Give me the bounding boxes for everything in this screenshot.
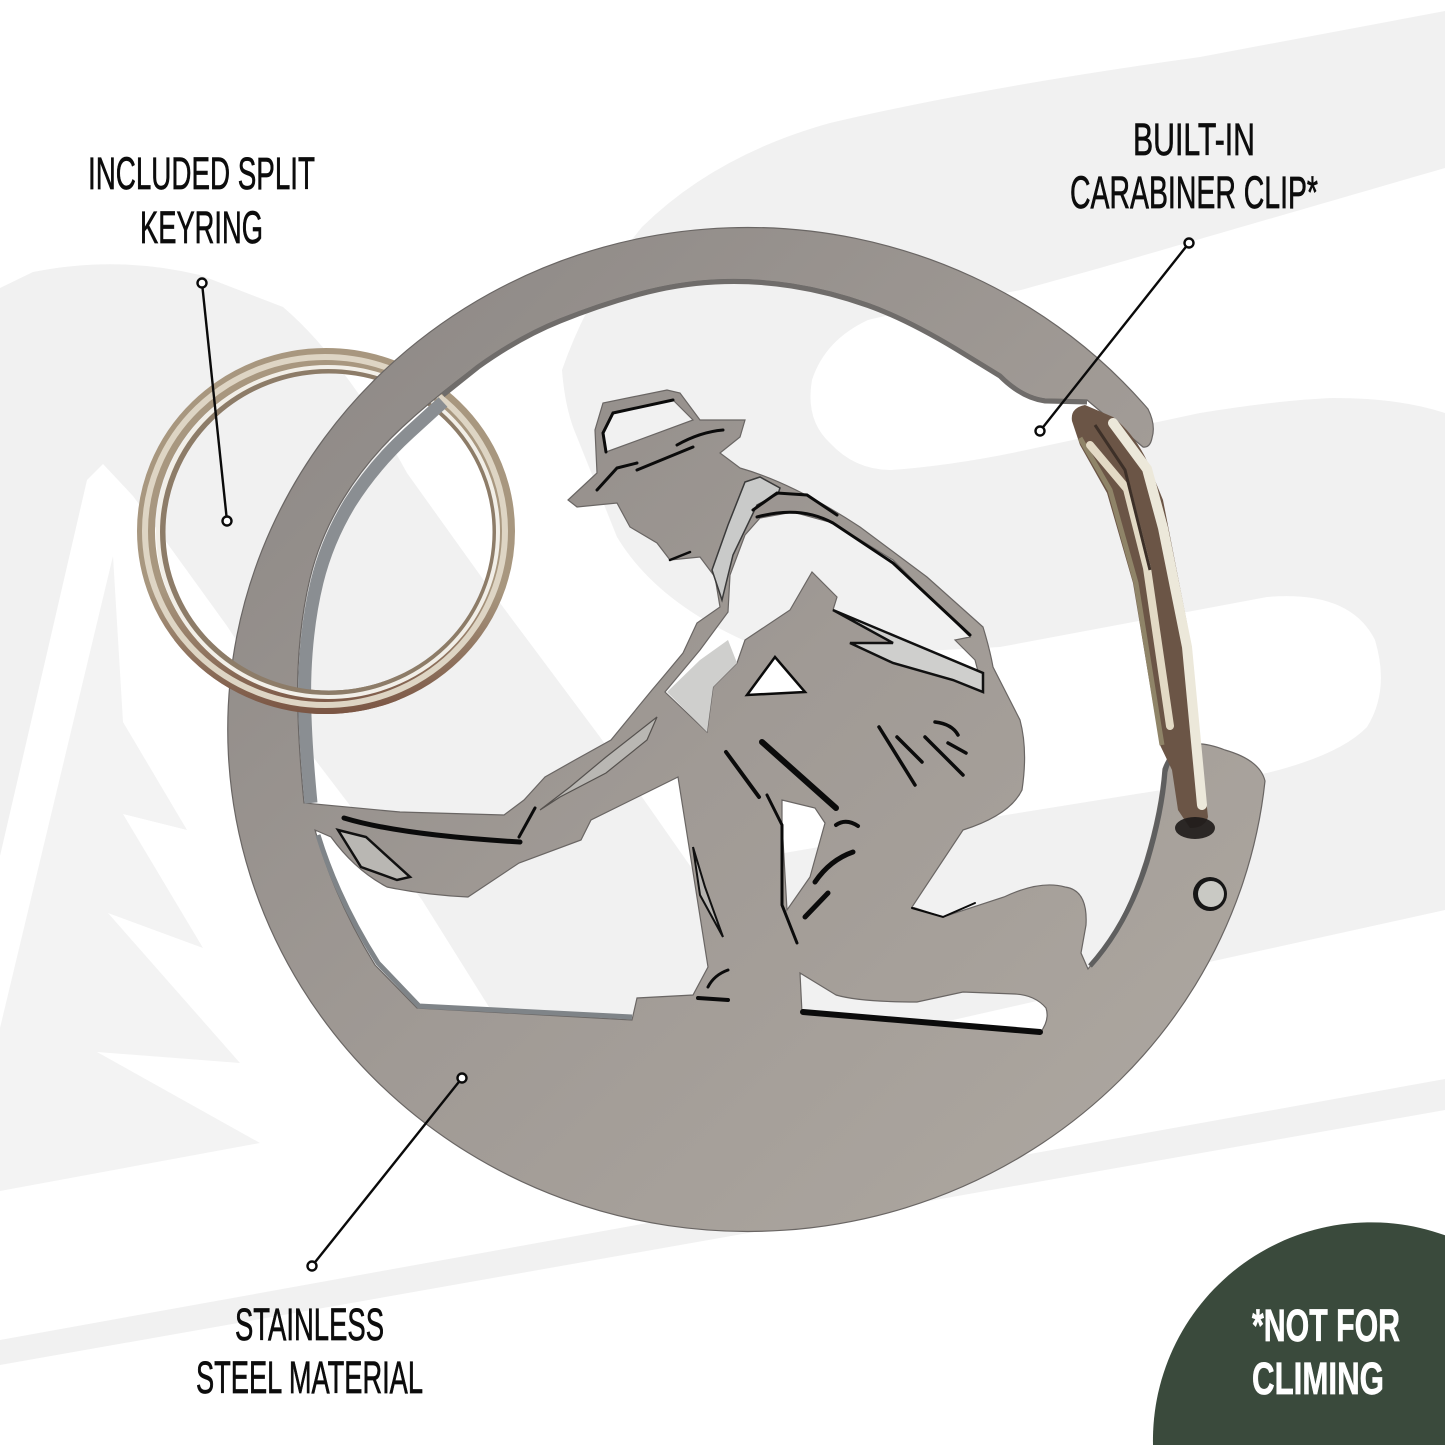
shaded arm gap: [540, 717, 657, 810]
inner bevel edge: left side: [305, 402, 443, 803]
carabiner body with prospector silhouette: [228, 227, 1265, 1231]
label: included split keyring: [88, 148, 315, 253]
label: built-in carabiner clip: [1070, 114, 1318, 218]
label: built-in carabiner clip: BUILT-IN: [1133, 114, 1255, 165]
badge: not for climbing: [1153, 1222, 1445, 1445]
shaded pan gap: [338, 830, 410, 880]
inner bevel edge: lower left hole: [318, 835, 632, 1017]
callout: keyring: [198, 278, 232, 526]
keyring front segment over body: [174, 640, 400, 714]
shaded neck gap: [712, 477, 780, 600]
label: stainless steel material: STEEL MATERIAL: [196, 1352, 423, 1403]
split keyring: [145, 357, 506, 705]
label: included split keyring: KEYRING: [140, 202, 263, 253]
callout: carabiner clip: [1036, 238, 1194, 436]
label: stainless steel material: STAINLESS: [235, 1299, 384, 1350]
badge: not for climbing: CLIMING: [1252, 1353, 1384, 1404]
shaded shin gap: [693, 847, 723, 937]
label: stainless steel material: [196, 1299, 423, 1403]
inner bevel edge: top arc: [443, 282, 1087, 402]
rivet: [1193, 877, 1227, 911]
engraved black detail lines: [344, 400, 1040, 1032]
shaded coat panel: [833, 610, 983, 692]
carabiner spring gate wires: [1072, 405, 1208, 828]
label: included split keyring: INCLUDED SPLIT: [88, 148, 315, 199]
inner bevel edge: right side: [1090, 752, 1177, 966]
shaded chest gap: [667, 640, 737, 732]
callout: steel material: [308, 1074, 466, 1270]
gate pin hole: [1175, 817, 1215, 839]
